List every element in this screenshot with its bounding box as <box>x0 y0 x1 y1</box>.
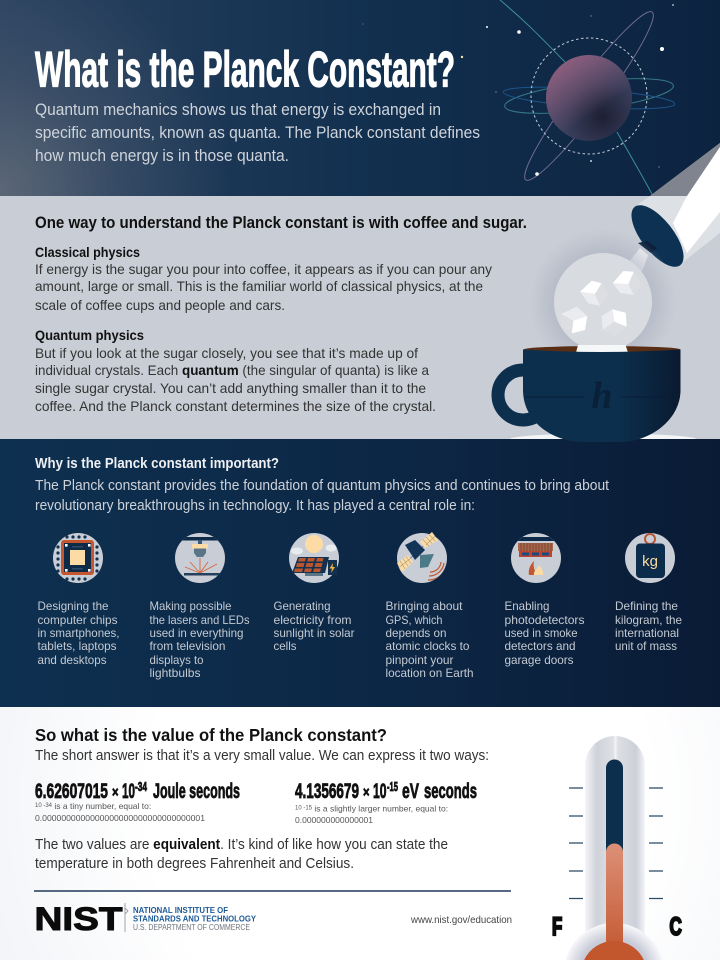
text block: quantum physics: individual crystals. Each quantum (the singular of quanta) is like a <box>35 362 429 378</box>
illustration: planet with orbits <box>500 0 675 196</box>
icon: computer chip <box>53 533 103 583</box>
handle <box>498 370 548 420</box>
intro text: specific amounts, known as quanta. The Planck constant defines <box>35 124 480 142</box>
caption: solar <box>274 599 354 653</box>
NIST logo <box>34 901 256 937</box>
text block: revolutionary breakthroughs in technology. It has played a central role in: <box>35 498 475 514</box>
value: eV seconds: 10 <box>373 780 386 803</box>
caption: chips <box>38 599 120 667</box>
NIST logo: NIST <box>34 901 123 937</box>
text block: equivalent <box>35 837 448 872</box>
caption: photodetectors: garage doors <box>504 653 574 667</box>
sugar cube <box>613 271 641 295</box>
note: tiny number: 10 -34 <box>35 803 53 809</box>
text block <box>35 478 609 514</box>
heading: One way to understand the Planck constant is with coffee and sugar. <box>35 214 527 232</box>
value: eV seconds <box>295 779 477 803</box>
text block: classical physics <box>35 244 492 313</box>
NIST logo: U.S. DEPARTMENT OF COMMERCE <box>133 923 250 932</box>
text block: quantum physics <box>35 327 436 414</box>
caption: GPS: GPS, which <box>386 613 442 627</box>
note: larger number: is a slightly larger number, equal to: <box>312 804 448 814</box>
intro text <box>35 101 480 165</box>
caption: kilogram: unit of mass <box>615 639 677 653</box>
sugar cube <box>602 309 627 337</box>
caption: chips: tablets, laptops <box>38 639 116 653</box>
caption: photodetectors: photodetectors <box>504 613 584 627</box>
caption: kilogram: international <box>615 626 679 640</box>
illustration: saucer <box>509 434 697 440</box>
cup body <box>523 350 680 442</box>
caption: GPS: atomic clocks to <box>386 639 470 653</box>
caption: chips: computer chips <box>38 613 118 627</box>
note: larger number: 10 -15 <box>295 806 313 812</box>
illustration: sugar shaker <box>622 143 720 275</box>
text block: classical physics: If energy is the sugar you pour into coffee, it appears as if you can pour any <box>35 261 492 277</box>
heading: So what is the value of the Planck constant? <box>35 725 387 745</box>
icon: smoke detector <box>511 533 561 583</box>
icon: laser <box>175 533 225 583</box>
sugar cube <box>580 281 608 306</box>
note: tiny number: is a tiny number, equal to: <box>52 801 151 811</box>
value: joule seconds: Joule seconds <box>153 780 240 803</box>
caption: photodetectors: Enabling <box>504 599 550 613</box>
caption: solar: electricity from <box>274 613 352 627</box>
note: larger number: 0.000000000000001 <box>295 815 373 825</box>
text block: The Planck constant provides the foundation of quantum physics and continues to bring about <box>35 478 609 494</box>
caption: lasers: the lasers and LEDs <box>150 613 250 627</box>
caption: GPS: pinpoint your <box>386 653 454 667</box>
value: joule seconds: × <box>112 784 119 801</box>
caption: GPS: Bringing about <box>386 599 463 613</box>
intro text: how much energy is in those quanta. <box>35 147 289 165</box>
caption: lasers: Making possible <box>150 599 232 613</box>
panel: why important <box>0 439 720 707</box>
text block: quantum physics: single sugar crystal. You can’t add anything smaller than it to the <box>35 380 426 396</box>
value: eV seconds: × <box>363 784 370 801</box>
caption: kilogram: kilogram, the <box>615 613 682 627</box>
note: tiny number <box>35 801 205 823</box>
panel: header <box>0 0 720 196</box>
website: www.nist.gov/education <box>410 914 512 926</box>
stars <box>362 4 674 176</box>
caption: solar: cells <box>274 639 296 653</box>
value: joule seconds: 10 <box>122 780 135 803</box>
value: joule seconds: 6.62607015 <box>35 780 108 803</box>
note: tiny number: 0.0000000000000000000000000000000001 <box>35 813 205 823</box>
value: eV seconds: -15 <box>387 779 398 794</box>
value: eV seconds: seconds <box>424 780 477 803</box>
value: joule seconds <box>35 779 240 803</box>
value: eV seconds: eV <box>402 780 419 803</box>
text block: equivalent: temperature in both degrees Fahrenheit and Celsius. <box>35 856 354 872</box>
NIST logo: STANDARDS AND TECHNOLOGY <box>133 914 256 924</box>
caption: photodetectors: used in smoke <box>504 626 578 640</box>
caption: lasers: lightbulbs <box>150 666 200 680</box>
text block: equivalent: The two values are equivalent. It’s kind of like how you can state the <box>35 837 448 853</box>
text block: quantum physics: coffee. And the Planck constant determines the size of the crystal. <box>35 398 436 414</box>
text block: classical physics: amount, large or small. This is the familiar world of classical physics, at the <box>35 278 483 294</box>
scale label C: C <box>670 913 682 941</box>
caption: GPS <box>386 599 474 680</box>
caption: kilogram: Defining the <box>615 599 678 613</box>
caption: chips: and desktops <box>38 653 106 667</box>
ticks <box>569 788 663 898</box>
text block: quantum physics: But if you look at the sugar closely, you see that it’s made up of <box>35 345 418 361</box>
heading: Why is the Planck constant important? <box>35 456 279 472</box>
icon: kilogram weight <box>625 533 675 583</box>
caption: lasers: from television <box>150 639 226 653</box>
coffee surface <box>524 346 680 353</box>
icon: GPS satellite <box>397 532 447 583</box>
caption: solar: Generating <box>274 599 330 613</box>
icon: solar panel <box>289 533 339 583</box>
caption: lasers <box>150 599 250 680</box>
short answer: The short answer is that it’s a very small value. We can express it two ways: <box>35 748 489 764</box>
h symbol: h <box>591 375 613 417</box>
caption: solar: sunlight in solar <box>274 626 354 640</box>
NIST logo: NATIONAL INSTITUTE OF <box>133 905 228 915</box>
caption: chips: Designing the <box>38 599 109 613</box>
caption: photodetectors <box>504 599 584 667</box>
panel: value of the Planck constant <box>0 707 720 960</box>
intro text: Quantum mechanics shows us that energy is exchanged in <box>35 101 441 119</box>
text block: quantum physics: Quantum physics <box>35 327 144 343</box>
sugar cube <box>561 307 587 333</box>
title: What is the Planck Constant? <box>35 42 455 98</box>
caption: GPS: depends on <box>386 626 446 640</box>
caption: photodetectors: detectors and <box>504 639 576 653</box>
scale label F: F <box>552 913 562 941</box>
caption: GPS: location on Earth <box>386 666 474 680</box>
value: joule seconds: -34 <box>135 779 147 794</box>
note: larger number <box>295 804 448 825</box>
text block: classical physics: Classical physics <box>35 244 140 260</box>
caption: lasers: displays to <box>150 653 204 667</box>
caption: kilogram <box>615 599 682 653</box>
illustration: magnified sugar crystals <box>529 228 677 376</box>
panel: coffee and sugar <box>0 196 720 439</box>
caption: lasers: used in everything <box>150 626 244 640</box>
illustration: thermometer <box>552 736 682 960</box>
caption: chips: in smartphones, <box>38 626 120 640</box>
illustration: coffee cup <box>498 345 680 442</box>
text block: classical physics: scale of coffee cups and people and cars. <box>35 297 285 313</box>
value: eV seconds: 4.1356679 <box>295 780 359 803</box>
icon: kilogram weight: kg <box>642 553 658 570</box>
